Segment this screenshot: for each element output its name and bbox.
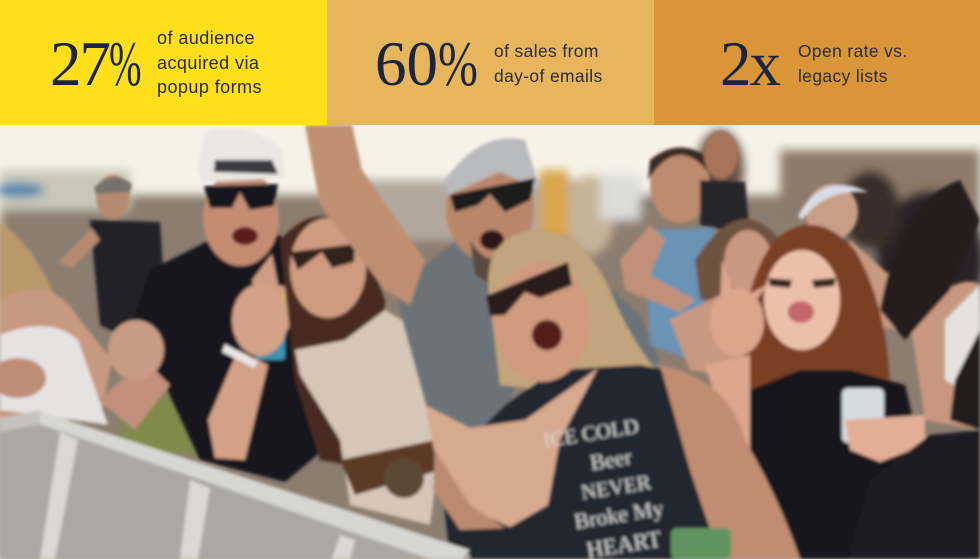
stat text: open rate: legacy lists: [798, 66, 888, 86]
stat text: day-of emails: [494, 41, 603, 86]
person: blonde woman in black tank: NEVER: [579, 470, 652, 504]
metal barricade railing: [0, 410, 470, 559]
stat text: day-of emails: of sales from: [494, 41, 599, 61]
person: woman in blue cap: [798, 184, 898, 330]
person: woman in plaid shirt: [620, 147, 715, 360]
stat number: 60%: %: [438, 29, 478, 99]
person: blonde woman in black tank: [425, 230, 800, 559]
stat text: audience acquired: acquired via: [157, 53, 259, 73]
person: man in white cap: [98, 129, 335, 482]
person: redhead with tongue out: [705, 225, 925, 559]
stat number: 60%: [375, 29, 478, 99]
stat number: 60%: 60: [375, 29, 438, 99]
stat text: open rate: Open rate vs.: [798, 41, 908, 61]
person: woman far right: [848, 180, 980, 559]
person: blonde woman in black tank: Broke My: [573, 495, 665, 534]
stat text: day-of emails: day-of emails: [494, 66, 603, 86]
person: blonde woman in black tank: Beer: [588, 444, 634, 475]
person: man behind, dark shirt: [700, 131, 750, 235]
person: woman in white top: [208, 216, 440, 525]
sky background: [0, 125, 980, 559]
stat text: audience acquired: [157, 28, 262, 97]
stat panel: 2x open rate: [654, 0, 980, 125]
photo: festival crowd: [0, 125, 980, 559]
person: man in grey cap: [305, 125, 660, 440]
background crowd: [0, 130, 980, 559]
stat number: 27%: 27: [50, 29, 109, 99]
stat text: open rate: [798, 41, 908, 86]
stat number: 27%: %: [109, 29, 142, 99]
stat panel: 27% of audience: [0, 0, 327, 125]
person: woman at far left: [0, 222, 112, 425]
stat number: 2x: 2x: [720, 29, 779, 99]
stat number: 27%: [50, 29, 142, 99]
stat text: audience acquired: of audience: [157, 28, 255, 48]
stat panel: 60% of sales: [327, 0, 654, 125]
person: man in tank top: [58, 175, 165, 350]
stat text: audience acquired: popup forms: [157, 77, 262, 97]
person: blonde woman in black tank: ICE COLD: [541, 414, 640, 452]
person: woman with sunglasses, right of plaid: [670, 219, 780, 380]
